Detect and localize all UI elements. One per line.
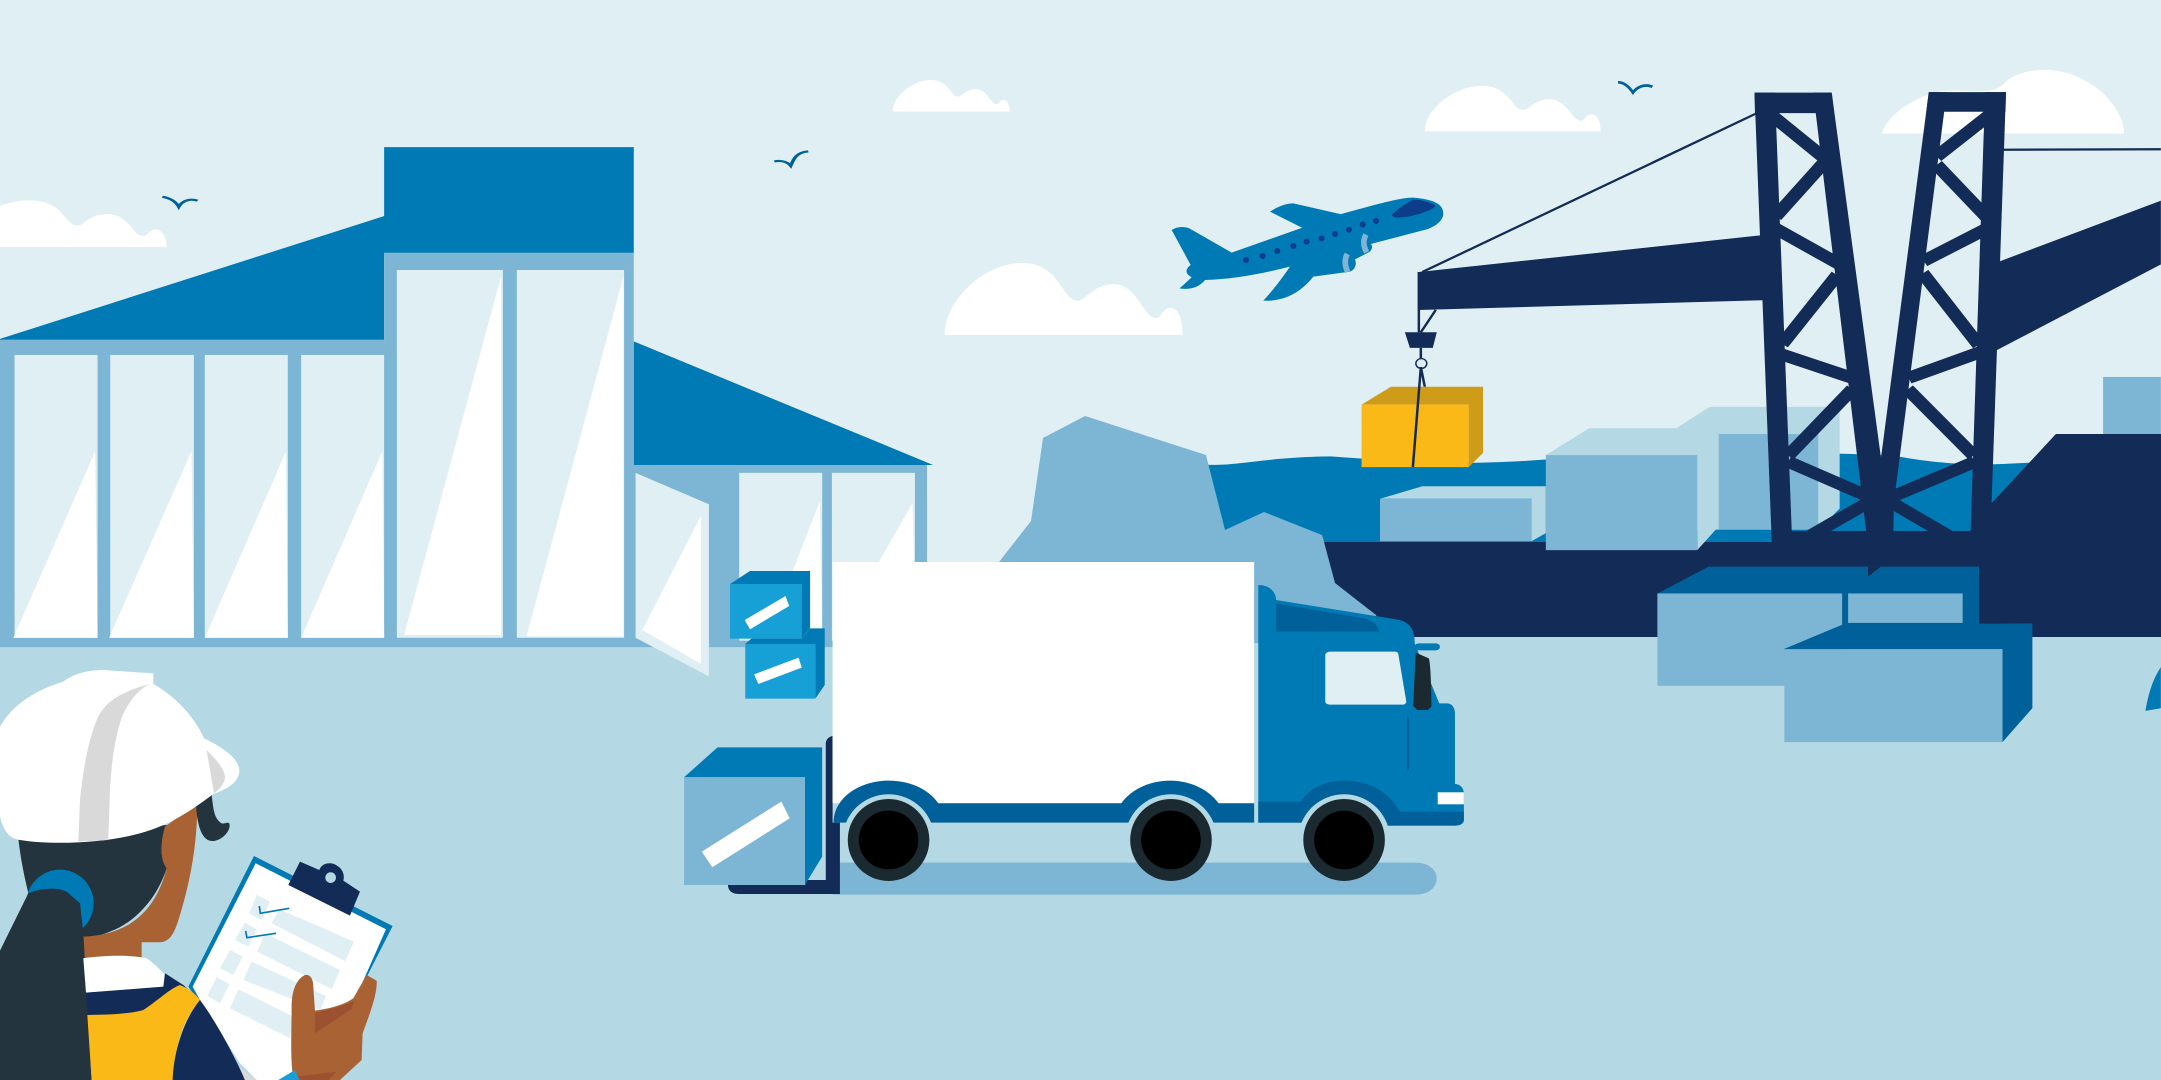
truck — [833, 562, 1464, 881]
box: lower blue — [745, 628, 825, 699]
cloud: large centre — [945, 263, 1183, 335]
cloud: left — [0, 200, 167, 247]
side window — [1325, 652, 1406, 705]
cloud: above crane arm — [1425, 86, 1601, 131]
shirt collar — [83, 956, 177, 993]
scrunchie — [26, 870, 94, 937]
sleeve shadow — [239, 1067, 257, 1080]
cab — [1258, 585, 1464, 826]
engine bands — [1345, 235, 1367, 272]
open door — [636, 473, 709, 676]
hard hat stripe — [78, 684, 150, 842]
clip — [288, 862, 360, 916]
box: top blue — [730, 571, 810, 639]
bird: centre — [774, 151, 808, 166]
water — [1201, 454, 2047, 551]
navy sleeve — [173, 1000, 245, 1080]
airplane — [1172, 198, 1443, 301]
cab lower trim — [1258, 781, 1464, 826]
mirror arm — [1415, 643, 1440, 650]
fuselage and tail — [1172, 198, 1443, 301]
hull right block — [1380, 434, 2161, 637]
ponytail — [0, 889, 92, 1080]
stacked boxes and forklift — [684, 571, 1437, 895]
cargo body — [833, 562, 1254, 803]
wall frame — [0, 253, 927, 647]
hair tuft — [196, 795, 230, 841]
ground — [0, 637, 2161, 1080]
door line — [1406, 717, 1410, 770]
back cargo stack — [1676, 407, 1840, 530]
wheel: front — [1303, 799, 1385, 881]
right jib — [1993, 201, 2161, 352]
cockpit — [1392, 199, 1436, 218]
low windows — [13, 355, 384, 638]
main roof — [0, 147, 634, 341]
hard hat brim shadow — [207, 750, 225, 793]
back cargo front panel — [1719, 434, 1818, 530]
low pale cargo — [1380, 486, 1546, 541]
ship hull — [1324, 434, 2161, 637]
clipboard — [188, 856, 393, 1080]
cloud: behind crane towers — [1882, 70, 2124, 134]
upper wing — [1270, 203, 1342, 230]
front cargo pallet front — [1783, 623, 2032, 742]
hand — [291, 975, 377, 1080]
cargo and crane — [1362, 92, 2161, 742]
check marks — [246, 906, 289, 938]
ground shadow — [833, 863, 1437, 895]
mirror — [1413, 653, 1431, 710]
annex windows — [739, 473, 915, 641]
navy shirt band — [86, 973, 200, 1017]
sky — [0, 0, 2161, 640]
wrist shadow — [297, 1072, 337, 1080]
support cables — [1422, 114, 2161, 272]
right tower — [1868, 92, 2006, 547]
cloud: top centre — [893, 80, 1010, 112]
left tower — [1754, 93, 1978, 547]
wheel gaps — [843, 794, 1390, 840]
face and neck — [83, 803, 197, 958]
hull silhouette — [1324, 434, 2161, 637]
worker with clipboard — [0, 670, 393, 1080]
tall windows — [397, 270, 624, 638]
edge sail shape — [2145, 667, 2161, 711]
front pale cargo — [1546, 428, 1719, 550]
clip hole — [325, 872, 336, 883]
mountain — [999, 416, 1382, 643]
windows — [1243, 218, 1379, 263]
hand shadow — [315, 1001, 354, 1033]
windshield — [1276, 603, 1379, 632]
yellow crate — [1362, 367, 1483, 467]
crane — [1405, 92, 2161, 547]
wheel: rear — [848, 799, 929, 881]
cuff — [278, 1070, 299, 1080]
tall building right — [2103, 377, 2161, 435]
checklist rows — [207, 895, 354, 1038]
wheel: middle — [1130, 799, 1212, 881]
headlight — [1438, 792, 1464, 804]
hard hat — [0, 670, 239, 843]
hair — [18, 825, 167, 937]
front cargo pallet back — [1657, 567, 1979, 686]
chassis — [834, 781, 1254, 823]
warehouse — [0, 147, 933, 676]
bird: left — [162, 197, 198, 207]
large box — [684, 747, 822, 885]
bird: right — [1618, 82, 1652, 93]
yellow vest — [87, 985, 200, 1080]
left jib — [1419, 235, 1766, 310]
annex roof — [634, 341, 933, 465]
forklift — [728, 736, 840, 894]
port scene background — [1201, 377, 2161, 551]
hook block and cables — [1405, 272, 1437, 387]
